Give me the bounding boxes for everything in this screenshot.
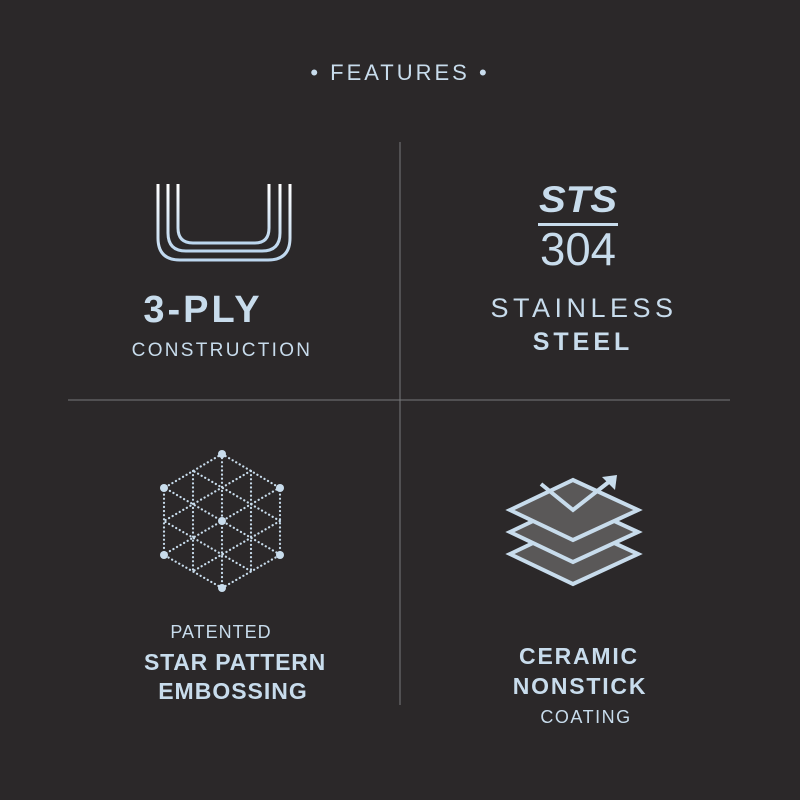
icon: hexagon star pattern xyxy=(160,450,284,592)
heading: ceramic: CERAMIC xyxy=(519,643,639,669)
icon: 3-ply layers xyxy=(156,184,292,262)
heading: stainless: STAINLESS xyxy=(490,293,678,323)
panel: 3-ply xyxy=(132,184,312,361)
icon: STS 304: STS xyxy=(539,179,617,220)
heading: steel: STEEL xyxy=(533,328,633,356)
heading: nonstick: NONSTICK xyxy=(513,673,647,699)
heading: 3-PLY: 3-PLY xyxy=(143,289,263,331)
heading: star pattern: STAR PATTERN xyxy=(144,649,326,675)
text: patented: PATENTED xyxy=(170,622,272,642)
panel: star pattern embossing xyxy=(144,450,326,704)
panel: stainless steel xyxy=(490,179,678,356)
title: • FEATURES • xyxy=(310,60,490,85)
heading: embossing: EMBOSSING xyxy=(158,678,308,704)
icon: STS 304 xyxy=(538,179,618,270)
text: construction: CONSTRUCTION xyxy=(132,340,312,361)
text: coating: COATING xyxy=(540,707,632,727)
icon: layers with arrow xyxy=(506,475,643,586)
panel: ceramic nonstick xyxy=(506,475,647,727)
